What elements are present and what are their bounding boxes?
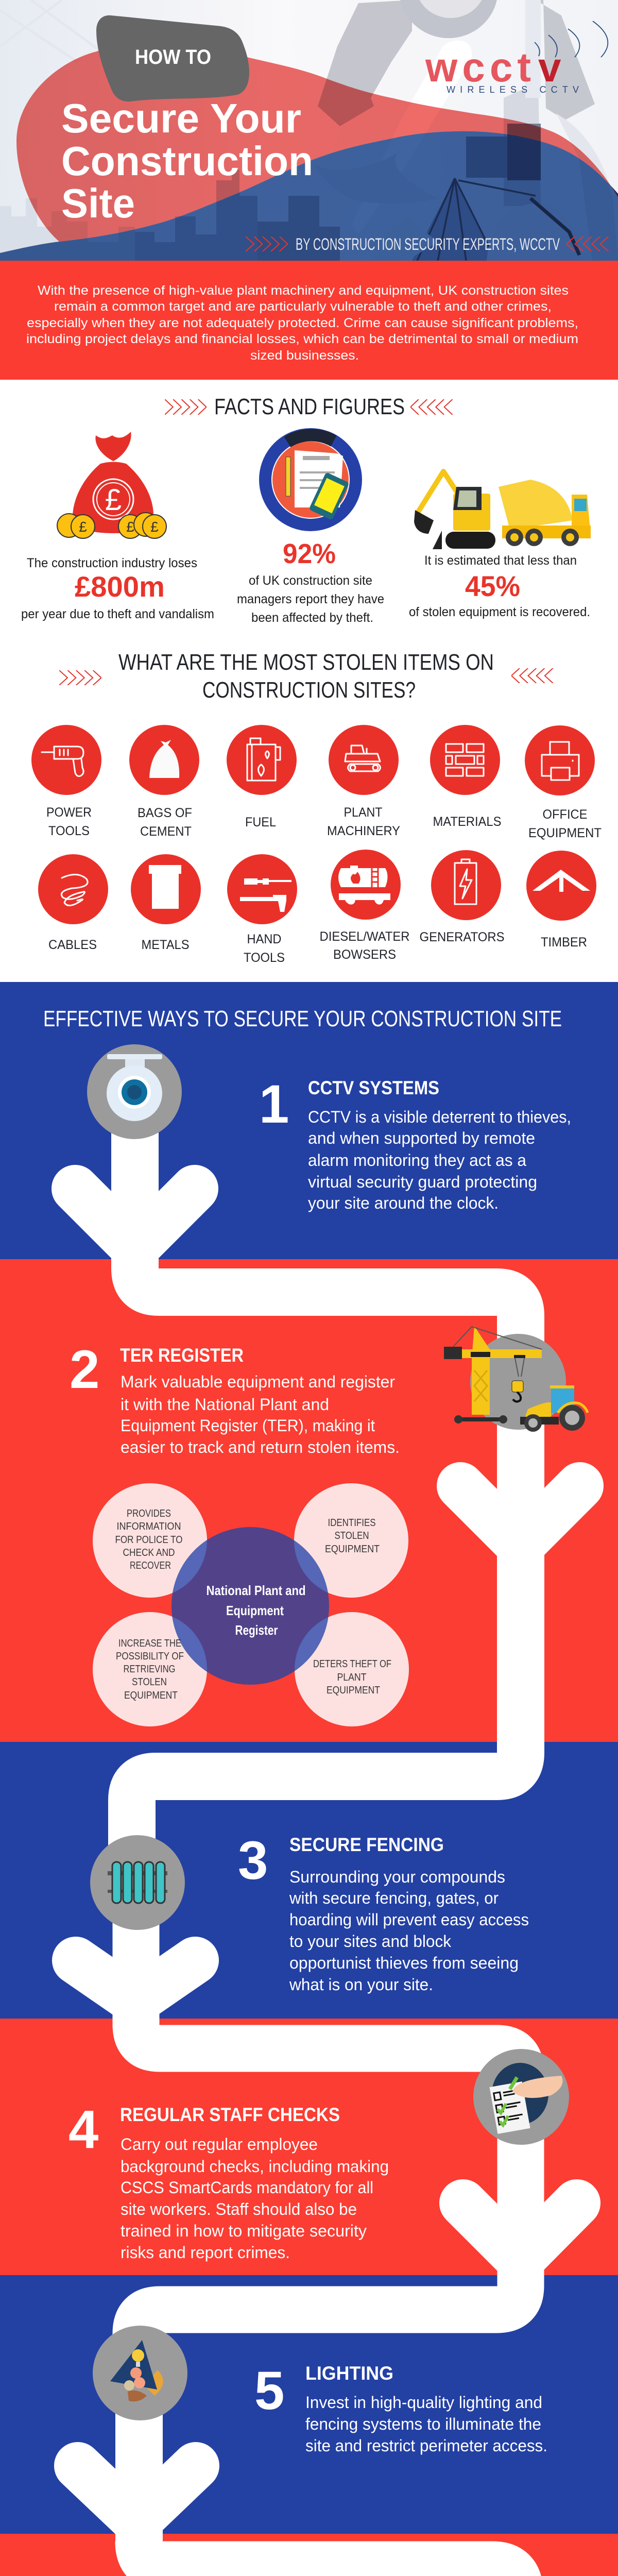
venn item: police info: RECOVER xyxy=(130,1560,171,1571)
fact: 45%: of stolen equipment is recovered. xyxy=(409,605,590,619)
venn item: increase: EQUIPMENT xyxy=(124,1690,178,1701)
fact: 92%: of UK construction site xyxy=(249,573,372,588)
logo: wcctv: wcct xyxy=(425,44,531,90)
item: office equipment: EQUIPMENT xyxy=(528,826,602,840)
step 2: ter register: TER REGISTER xyxy=(120,1345,244,1366)
step 2 text: it with the National Plant and xyxy=(121,1395,329,1414)
venn item: deters: PLANT xyxy=(337,1672,367,1683)
step 3 text xyxy=(289,1868,529,1994)
venn item: police info: PROVIDES xyxy=(127,1508,171,1519)
step 1 text: CCTV is a visible deterrent to thieves, xyxy=(308,1108,571,1126)
venn item: deters: DETERS THEFT OF xyxy=(313,1658,391,1670)
icon: money bag xyxy=(57,432,166,538)
blue wave xyxy=(0,131,618,261)
item: cables xyxy=(38,854,108,952)
venn centre label: National Plant and xyxy=(206,1583,306,1598)
intro text xyxy=(26,283,578,363)
item: plant machinery: PLANT xyxy=(344,805,382,820)
item: bags of cement: BAGS OF xyxy=(138,806,192,820)
item: hand tools: TOOLS xyxy=(244,951,285,965)
venn item: identifies xyxy=(325,1517,380,1555)
item: plant machinery: MACHINERY xyxy=(327,824,400,838)
venn item: identifies: STOLEN xyxy=(335,1530,369,1541)
item: metals xyxy=(131,854,201,952)
venn centre label: Equipment xyxy=(226,1603,284,1618)
fact: 92% xyxy=(237,538,384,625)
step 4 text xyxy=(121,2135,389,2262)
fact: 45%: 45% xyxy=(465,570,520,602)
step 2 text: Equipment Register (TER), making it xyxy=(121,1416,375,1435)
venn item: increase: STOLEN xyxy=(132,1676,167,1688)
step 3 text: what is on your site. xyxy=(289,1975,433,1994)
heading: most stolen items xyxy=(59,650,553,703)
step 5 text xyxy=(305,2393,547,2455)
fact: 800m: £800m xyxy=(75,570,165,603)
heading: most stolen items: CONSTRUCTION SITES? xyxy=(202,677,416,703)
heading: facts: FACTS AND FIGURES xyxy=(214,394,405,419)
header photo background xyxy=(0,0,618,261)
step 5: lighting: LIGHTING xyxy=(305,2363,393,2384)
grey badge: HOW TO xyxy=(135,46,211,69)
step 4 text: CSCS SmartCards mandatory for all xyxy=(121,2178,373,2197)
venn item: deters: EQUIPMENT xyxy=(327,1685,380,1696)
logo: wcctv: WIRELESS CCTV xyxy=(447,84,579,95)
venn item: increase: RETRIEVING xyxy=(124,1664,175,1675)
step 3: secure fencing: 3 xyxy=(238,1831,268,1891)
logo: wcctv xyxy=(425,21,608,95)
venn centre label xyxy=(206,1583,306,1638)
icon: survey document xyxy=(265,434,356,525)
title xyxy=(61,95,313,226)
intro text: especially when they are not adequately protected. Crime can cause significant problems, xyxy=(27,316,578,330)
fact: 92%: managers report they have xyxy=(237,592,384,606)
item: timber xyxy=(526,851,596,950)
item: hand tools: HAND xyxy=(247,932,281,946)
item: metals: METALS xyxy=(141,938,190,952)
icon: lightbulb xyxy=(93,2326,187,2420)
fact: 800m: The construction industry loses xyxy=(27,556,197,570)
icon: money bag: £ xyxy=(79,519,87,535)
chart: register venn diagram xyxy=(93,1483,409,1726)
fact: 45%: It is estimated that less than xyxy=(424,553,577,568)
item: bowsers: BOWSERS xyxy=(333,947,396,962)
icon: money bag: £ xyxy=(150,519,159,535)
step 1: cctv systems: 1 xyxy=(259,1074,289,1134)
item: cables: CABLES xyxy=(48,938,97,952)
venn item: increase: INCREASE THE xyxy=(118,1638,181,1649)
step 5: lighting xyxy=(93,2326,547,2455)
venn item: deters xyxy=(313,1658,391,1696)
item: power tools: POWER xyxy=(46,805,92,820)
logo: wcctv: v xyxy=(538,44,561,90)
venn item: identifies: IDENTIFIES xyxy=(328,1517,376,1529)
venn item: identifies: EQUIPMENT xyxy=(325,1544,380,1555)
icon: excavator and mixer xyxy=(414,471,591,549)
title: Site xyxy=(61,180,135,226)
step 1: cctv systems: CCTV SYSTEMS xyxy=(308,1077,439,1098)
step 1 text xyxy=(308,1108,571,1212)
fact: 92%: been affected by theft. xyxy=(251,611,373,625)
step 3 text: to your sites and block xyxy=(289,1932,452,1951)
intro text: including project delays and financial losses, which can be detrimental to small or medium xyxy=(26,332,578,346)
panel: effective ways band backgrounds xyxy=(0,982,618,2576)
step 5 text: site and restrict perimeter access. xyxy=(305,2436,547,2455)
step 4 text: background checks, including making xyxy=(121,2157,389,2176)
fact: 800m: per year due to theft and vandalism xyxy=(21,607,214,621)
arrow path: winding white road with arrowheads xyxy=(33,1092,580,2576)
item: power tools xyxy=(31,725,101,838)
step 3 text: opportunist thieves from seeing xyxy=(289,1954,519,1972)
fact: 92%: 92% xyxy=(283,538,336,569)
item: office equipment xyxy=(525,725,602,840)
item: generators xyxy=(419,850,505,944)
step 3: secure fencing xyxy=(90,1831,529,1994)
intro text: remain a common target and are particularly vulnerable to theft and other crimes, xyxy=(54,299,552,314)
fact: 45% xyxy=(409,553,590,619)
item: plant machinery xyxy=(327,725,400,838)
item: bags of cement xyxy=(129,725,199,839)
icon: crane and tractor xyxy=(444,1326,588,1432)
grey badge xyxy=(96,15,249,101)
item: materials: MATERIALS xyxy=(433,815,502,829)
step 5 text: fencing systems to illuminate the xyxy=(305,2415,541,2433)
step 1: cctv systems xyxy=(87,1044,571,1212)
icon: money bag: £ xyxy=(105,483,122,517)
item: power tools: TOOLS xyxy=(48,824,90,838)
step 2 text xyxy=(121,1372,400,1456)
item: office equipment: OFFICE xyxy=(543,807,587,822)
title: Construction xyxy=(61,138,313,184)
step 3 text: Surrounding your compounds xyxy=(289,1868,505,1886)
panel: facts and figures xyxy=(0,380,618,982)
title: Secure Your xyxy=(61,95,301,141)
item: bags of cement: CEMENT xyxy=(140,824,192,839)
step 1 text: virtual security guard protecting xyxy=(308,1173,537,1191)
item: bowsers: DIESEL/WATER xyxy=(319,929,410,944)
item: fuel xyxy=(227,725,297,829)
item: timber: TIMBER xyxy=(541,935,587,950)
step 2 text: Mark valuable equipment and register xyxy=(121,1372,395,1391)
step 3 text: hoarding will prevent easy access xyxy=(289,1910,529,1929)
venn item: police info: INFORMATION xyxy=(116,1521,181,1532)
step 4: regular staff checks: 4 xyxy=(68,2099,98,2160)
panel: intro xyxy=(0,261,618,380)
step 2: ter register xyxy=(70,1326,588,1726)
venn item: police info: CHECK AND xyxy=(123,1547,175,1558)
step 4: regular staff checks xyxy=(68,2049,569,2262)
step 5 text: Invest in high-quality lighting and xyxy=(305,2393,542,2412)
venn item: increase xyxy=(116,1638,184,1701)
step 3 text: with secure fencing, gates, or xyxy=(289,1889,499,1907)
step 4 text: Carry out regular employee xyxy=(121,2135,318,2154)
icon: checklist xyxy=(473,2049,569,2145)
step 1 text: alarm monitoring they act as a xyxy=(308,1151,526,1170)
step 5: lighting: 5 xyxy=(254,2361,284,2421)
item: hand tools xyxy=(227,854,297,965)
step 1 text: your site around the clock. xyxy=(308,1194,499,1212)
heading: most stolen items: WHAT ARE THE MOST STOLEN ITEMS ON xyxy=(118,650,494,675)
venn item: increase: POSSIBILITY OF xyxy=(116,1651,184,1662)
step 3: secure fencing: SECURE FENCING xyxy=(289,1834,444,1855)
red wave xyxy=(16,41,618,242)
icon: fence xyxy=(90,1835,185,1930)
intro text: With the presence of high-value plant machinery and equipment, UK construction sites xyxy=(38,283,569,298)
step 2: ter register: 2 xyxy=(70,1340,99,1400)
item: bowsers xyxy=(319,850,410,962)
intro text: sized businesses. xyxy=(250,348,359,363)
icon: money bag: £ xyxy=(126,519,134,535)
venn item: police info: FOR POLICE TO xyxy=(115,1534,182,1546)
step 2 text: easier to track and return stolen items. xyxy=(121,1438,400,1456)
panel: header banner xyxy=(0,0,618,261)
step 4 text: risks and report crimes. xyxy=(121,2243,290,2262)
venn centre label: Register xyxy=(235,1622,278,1638)
step 1 text: and when supported by remote xyxy=(308,1129,535,1147)
item: generators: GENERATORS xyxy=(419,930,505,944)
step 4 text: trained in how to mitigate security xyxy=(121,2222,367,2240)
fact: 800m xyxy=(21,556,214,621)
venn item: police info xyxy=(115,1508,182,1571)
item: fuel: FUEL xyxy=(245,815,276,829)
step 4 text: site workers. Staff should also be xyxy=(121,2200,357,2218)
step 4: regular staff checks: REGULAR STAFF CHECKS xyxy=(120,2104,340,2125)
icon: cctv camera xyxy=(87,1044,182,1139)
item: materials xyxy=(430,725,502,829)
